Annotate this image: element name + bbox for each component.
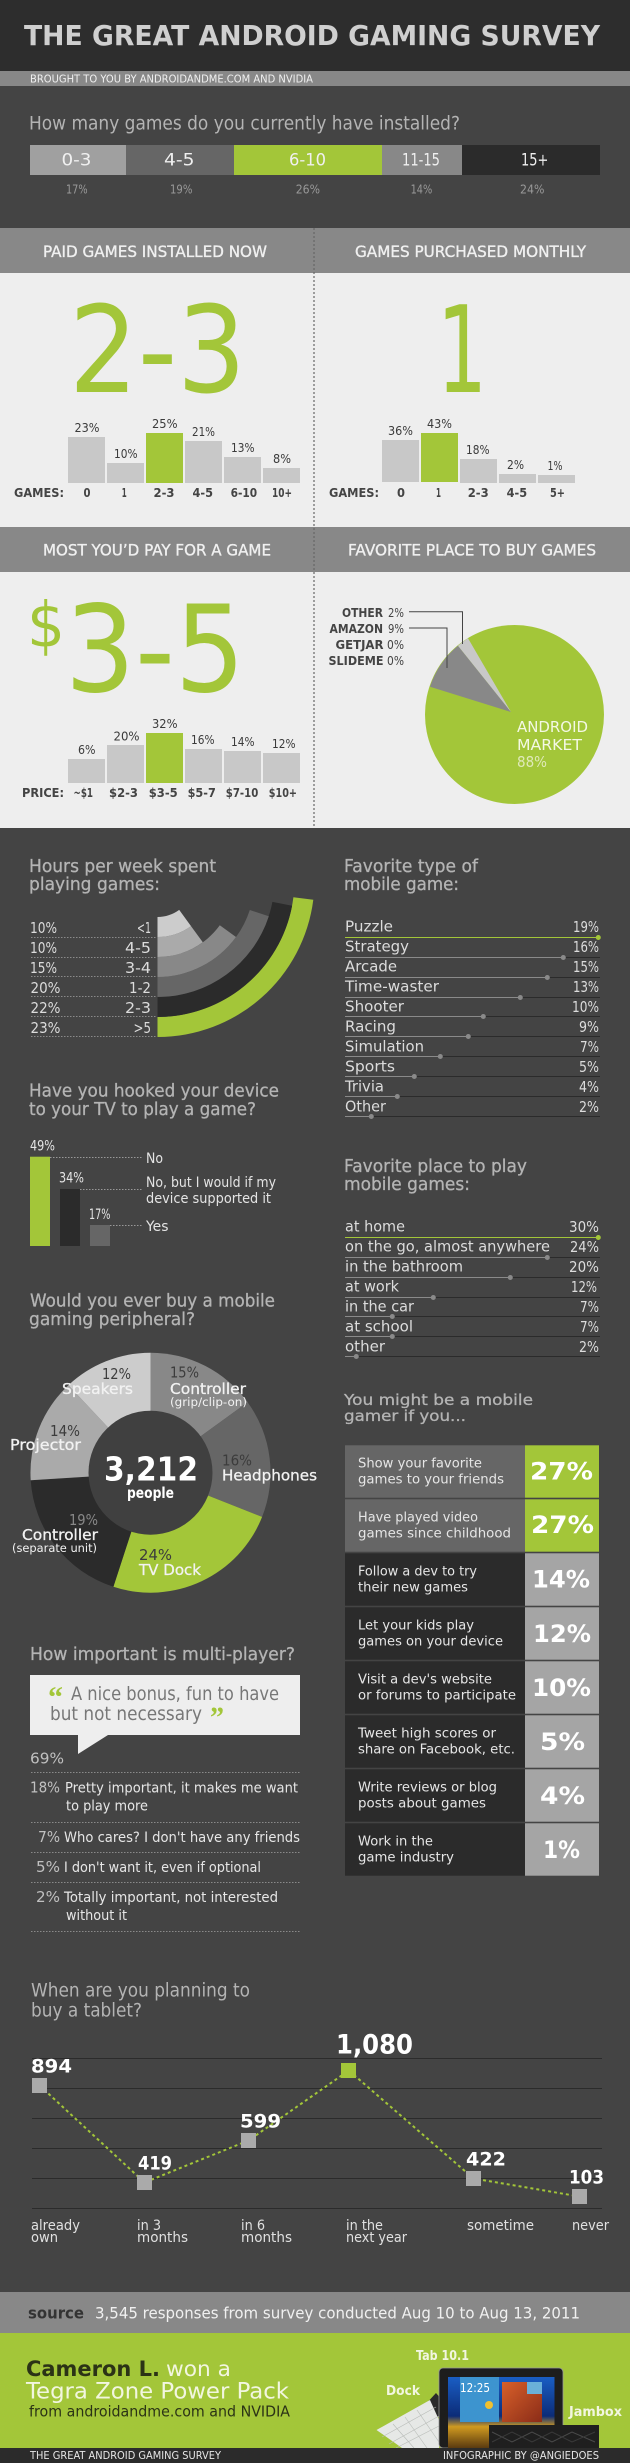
row labels: Time-waster	[344, 978, 440, 996]
axis labels: in 6	[241, 2218, 265, 2234]
heading: mobile games:	[344, 1174, 470, 1195]
chart values	[31, 2029, 604, 2188]
winner text: won a	[166, 2357, 231, 2381]
heading: Favorite place to play	[344, 1156, 527, 1177]
bar chart	[22, 717, 300, 800]
callout: but not necessary	[50, 1703, 202, 1725]
answer list: 7%	[38, 1828, 60, 1846]
winner text: Tegra Zone Power Pack	[25, 2379, 289, 2404]
big price: $	[27, 589, 65, 662]
row labels: 2%	[579, 1338, 599, 1356]
row labels: 24%	[570, 1238, 599, 1256]
row: show friends: 27%	[530, 1457, 593, 1485]
row: reviews	[345, 1769, 599, 1822]
heading: Have you hooked your device	[29, 1081, 279, 1102]
row labels: at work	[345, 1278, 399, 1296]
donut centre total	[104, 1450, 198, 1502]
axis labels: never	[572, 2218, 609, 2234]
row labels: Other	[345, 1098, 387, 1116]
bar values and labels: Yes	[145, 1219, 168, 1235]
bar chart: 2-3	[468, 486, 489, 500]
heading: When are you planning to	[31, 1981, 250, 2002]
section header band: row two	[0, 527, 630, 572]
panel: peripheral	[10, 1291, 317, 1593]
pie chart	[425, 625, 604, 804]
donut labels: TV Dock	[138, 1561, 201, 1579]
icon: tablet: 12:25	[460, 2381, 490, 2395]
pie labels: GETJAR	[336, 638, 384, 652]
bar chart: 13%	[231, 441, 254, 455]
table of hours: 10%	[30, 939, 57, 957]
prize labels: Tab 10.1	[416, 2348, 469, 2364]
big number: 2-3	[69, 282, 246, 421]
donut labels: 16%	[222, 1452, 252, 1470]
table of hours: >5	[134, 1019, 151, 1037]
bar chart: 4-5	[192, 486, 213, 500]
stacked bar: 0-3	[62, 151, 92, 171]
heading: mobile game:	[344, 874, 459, 895]
bar chart: 12%	[272, 737, 296, 751]
heading	[343, 1391, 533, 1425]
bar percentages: 14%	[411, 181, 432, 196]
row labels: 10%	[572, 998, 599, 1016]
pie labels: OTHER	[342, 606, 383, 620]
row labels: 15%	[573, 958, 599, 976]
donut labels: Projector	[10, 1436, 82, 1454]
row: since childhood: games since childhood	[358, 1525, 511, 1541]
donut labels: Controller	[170, 1380, 247, 1398]
row: show friends: Show your favorite	[358, 1455, 482, 1471]
bar chart: 8%	[273, 452, 291, 466]
bar values and labels: device supported it	[146, 1191, 271, 1207]
answer list: Pretty important, it makes me want	[65, 1781, 298, 1797]
row labels: in the car	[345, 1298, 415, 1316]
bar chart: GAMES:	[14, 486, 64, 500]
row labels: 2%	[579, 1098, 599, 1116]
bar percentages: 19%	[170, 181, 192, 196]
bar chart: ~$1	[74, 786, 93, 800]
chart values: 103	[569, 2166, 604, 2188]
row labels: 30%	[569, 1218, 599, 1236]
prize labels: Dock	[386, 2383, 421, 2399]
heading	[344, 1156, 527, 1195]
callout: ”	[210, 1701, 224, 1734]
heading	[29, 1291, 275, 1330]
row: website	[345, 1661, 599, 1714]
chart values: 894	[31, 2056, 72, 2078]
callout: A nice bonus, fun to have	[71, 1683, 279, 1705]
winner text: Cameron L.	[26, 2357, 160, 2381]
panel: hours per week	[29, 856, 313, 1037]
axis labels: in 3	[137, 2218, 161, 2234]
row: tweet: Tweet high scores or	[357, 1725, 496, 1741]
panel: tablet plans	[31, 1981, 609, 2246]
bar chart: 1%	[548, 459, 562, 473]
chart markers	[32, 2063, 587, 2204]
donut labels: 14%	[50, 1422, 80, 1440]
bar percentages	[66, 181, 544, 196]
stacked bar: 6-10	[289, 151, 326, 171]
heading	[344, 856, 479, 895]
stacked bar: 11-15	[402, 151, 440, 171]
donut labels: (separate unit)	[12, 1541, 97, 1555]
pie labels: 9%	[388, 622, 404, 636]
lollipop bars	[345, 1235, 601, 1359]
row: show friends	[345, 1445, 599, 1498]
bar chart: 25%	[152, 417, 178, 431]
heading: How many games do you currently have installed?	[29, 113, 460, 134]
android market label: 88%	[517, 753, 547, 771]
lollipop bars	[345, 935, 601, 1119]
row: tweet: share on Facebook, etc.	[358, 1741, 515, 1757]
bar chart: 5+	[550, 486, 565, 500]
row labels: 7%	[580, 1318, 599, 1336]
leader lines	[409, 612, 462, 668]
row: kids	[345, 1607, 599, 1660]
row: industry: 1%	[543, 1836, 580, 1864]
big price: 3-5	[65, 582, 245, 721]
row rules	[345, 1258, 600, 1356]
bar chart: $10+	[269, 786, 297, 800]
dotted line chart	[40, 2070, 580, 2196]
bar values and labels: No, but I would if my	[146, 1175, 276, 1191]
prize labels: Jambox	[568, 2404, 622, 2420]
bar chart: 43%	[427, 417, 452, 431]
dotted leaders	[50, 1158, 142, 1226]
source band: 3,545 responses from survey conducted Aug 10 to Aug 13, 2011	[95, 2304, 580, 2323]
row: reviews: Write reviews or blog	[358, 1779, 497, 1795]
row labels: Puzzle	[345, 918, 393, 936]
chart values: 422	[466, 2149, 506, 2171]
stacked bar: 15+	[521, 151, 548, 171]
panel: favorite place to play	[344, 1156, 601, 1359]
row: follow a dev: 14%	[532, 1566, 590, 1594]
answer list: 18%	[30, 1779, 60, 1797]
icon: keyboard dock	[376, 2393, 442, 2448]
bar chart: $3-5	[149, 786, 178, 800]
bar chart: 10%	[114, 447, 138, 461]
row labels: Arcade	[345, 958, 397, 976]
bar chart: 36%	[388, 424, 413, 438]
pie labels: SLIDEME	[328, 654, 384, 668]
bar chart: 14%	[231, 735, 254, 749]
heading: How important is multi-player?	[30, 1644, 295, 1665]
panel: games purchased monthly	[329, 282, 575, 500]
bar percentages: 26%	[296, 181, 320, 196]
bar chart: 20%	[114, 729, 140, 743]
bar chart: 32%	[152, 717, 178, 731]
row labels: other	[345, 1338, 386, 1356]
table of hours: 2-3	[125, 999, 151, 1017]
panel: favorite place to buy	[328, 606, 604, 804]
answer list: Who cares? I don't have any friends	[64, 1830, 300, 1846]
grid lines	[32, 2058, 602, 2208]
footer	[0, 2448, 630, 2463]
answer list: without it	[66, 1908, 127, 1924]
bar chart: PRICE:	[22, 786, 64, 800]
section header band: row one: PAID GAMES INSTALLED NOW	[43, 242, 267, 261]
light panels background	[0, 273, 630, 828]
bar chart: $7-10	[226, 786, 258, 800]
row: kids: 12%	[533, 1620, 591, 1648]
row labels: 7%	[580, 1298, 599, 1316]
heading: buy a tablet?	[31, 2001, 142, 2022]
row labels: in the bathroom	[345, 1258, 463, 1276]
row labels: Racing	[345, 1018, 396, 1036]
bar chart	[14, 417, 300, 500]
panel: multi-player	[30, 1644, 300, 1932]
panel: most you'd pay	[22, 582, 300, 800]
bar values and labels: No	[146, 1151, 163, 1167]
row: since childhood	[345, 1499, 599, 1552]
source band	[0, 2292, 630, 2333]
row labels: Trivia	[344, 1078, 384, 1096]
row labels	[344, 918, 599, 1116]
row labels: 4%	[579, 1078, 599, 1096]
row: industry: game industry	[358, 1849, 454, 1865]
answer list: to play more	[66, 1799, 148, 1815]
table of hours: 20%	[30, 979, 60, 997]
heading: You might be a mobile	[343, 1391, 533, 1409]
donut labels: Speakers	[62, 1380, 133, 1398]
bars	[30, 1157, 110, 1246]
big number: 1	[437, 282, 487, 421]
donut labels: (grip/clip-on)	[170, 1395, 247, 1409]
row: kids: games on your device	[358, 1633, 503, 1649]
callout: “	[48, 1681, 63, 1714]
bar chart: GAMES:	[329, 486, 379, 500]
row labels: 13%	[573, 978, 599, 996]
footer: THE GREAT ANDROID GAMING SURVEY	[29, 2450, 222, 2462]
bar chart: 4-5	[507, 486, 527, 500]
bar chart: 1	[436, 486, 441, 500]
row: industry: Work in the	[358, 1833, 433, 1849]
axis labels: months	[137, 2230, 188, 2246]
bar chart: $2-3	[109, 786, 138, 800]
table of hours: 23%	[30, 1019, 60, 1037]
row labels: Sports	[345, 1058, 395, 1076]
row: follow a dev: Follow a dev to try	[358, 1563, 477, 1579]
axis labels: sometime	[467, 2218, 534, 2234]
row labels: 16%	[573, 938, 599, 956]
bar values and labels: 34%	[59, 1171, 84, 1187]
bar values and labels: 49%	[30, 1139, 55, 1155]
answer list: 5%	[36, 1858, 60, 1876]
chart values: 599	[240, 2110, 281, 2132]
pie labels: 2%	[388, 606, 404, 620]
row labels: at school	[345, 1318, 413, 1336]
section header band: row one: GAMES PURCHASED MONTHLY	[355, 242, 586, 261]
table of hours: 22%	[30, 999, 60, 1017]
row: since childhood: Have played video	[358, 1509, 478, 1525]
row: show friends: games to your friends	[358, 1471, 504, 1487]
row labels: 12%	[571, 1278, 597, 1296]
heading: playing games:	[29, 874, 160, 895]
heading: to your TV to play a game?	[29, 1099, 256, 1120]
heading: gamer if you...	[344, 1407, 466, 1425]
table of hours: 4-5	[125, 939, 151, 957]
row: tweet	[345, 1715, 599, 1768]
winner text: from androidandme.com and NVIDIA	[29, 2403, 291, 2421]
donut labels: 12%	[102, 1365, 131, 1383]
header block	[0, 0, 630, 86]
donut labels: Headphones	[222, 1467, 317, 1485]
row: follow a dev	[345, 1553, 599, 1606]
android market label: MARKET	[517, 736, 583, 754]
answer list: 2%	[36, 1888, 60, 1906]
panel: hooked to tv	[29, 1081, 279, 1246]
row labels: 19%	[573, 918, 599, 936]
table of hours: <1	[137, 919, 151, 937]
dotted rules	[31, 1772, 300, 1932]
panel: you might be a mobile gamer	[343, 1391, 599, 1876]
row: kids: Let your kids play	[358, 1617, 474, 1633]
source band: source	[28, 2304, 84, 2323]
bar chart: 6%	[78, 743, 96, 757]
panel: paid games installed	[14, 282, 300, 500]
bar chart: 2%	[507, 458, 524, 472]
pie labels: 0%	[387, 638, 404, 652]
donut labels	[10, 1363, 317, 1579]
stacked bar: 4-5	[164, 151, 194, 171]
pie labels	[328, 606, 404, 668]
section header band: row two: FAVORITE PLACE TO BUY GAMES	[348, 541, 596, 560]
answer list: Totally important, not interested	[63, 1890, 278, 1906]
axis labels: next year	[346, 2230, 407, 2246]
bar chart: 2-3	[154, 486, 174, 500]
section header band: row two: MOST YOU’D PAY FOR A GAME	[43, 541, 271, 560]
android market label	[517, 718, 588, 771]
donut chart	[30, 1353, 271, 1593]
axis labels: already	[31, 2218, 80, 2234]
row labels: 5%	[579, 1058, 599, 1076]
row: website: Visit a dev's website	[358, 1671, 492, 1687]
bar values and labels: 17%	[89, 1207, 110, 1223]
subtitle: BROUGHT TO YOU BY ANDROIDANDME.COM AND NVIDIA	[30, 73, 314, 85]
bar chart: 0	[84, 486, 90, 500]
pie labels: AMAZON	[330, 622, 383, 636]
donut labels: 24%	[139, 1546, 172, 1564]
axis labels	[31, 2218, 609, 2246]
bar chart: 6-10	[231, 486, 257, 500]
row: industry	[345, 1823, 599, 1876]
row: follow a dev: their new games	[358, 1579, 468, 1595]
table of hours: 15%	[30, 959, 57, 977]
footer: INFOGRAPHIC BY @ANGIEDOES	[443, 2450, 599, 2462]
row: reviews: posts about games	[358, 1795, 486, 1811]
row: website: 10%	[532, 1674, 591, 1702]
answer list: I don't want it, even if optional	[64, 1860, 261, 1876]
icon: tablet	[439, 2368, 563, 2448]
bar chart: 0	[397, 486, 405, 500]
row labels: Strategy	[345, 938, 409, 956]
winner panel	[0, 2333, 630, 2448]
bar chart: 21%	[192, 425, 215, 439]
bar chart: 10+	[272, 486, 292, 500]
bar chart: 16%	[191, 733, 214, 747]
row labels	[345, 1218, 599, 1356]
axis labels: in the	[346, 2218, 383, 2234]
donut centre total: people	[127, 1484, 174, 1502]
donut centre total: 3,212	[104, 1450, 198, 1489]
chart values: 1,080	[336, 2029, 413, 2060]
title: THE GREAT ANDROID GAMING SURVEY	[24, 19, 601, 52]
bar percentages: 17%	[66, 181, 88, 196]
pie labels: 0%	[387, 654, 404, 668]
row: reviews: 4%	[540, 1782, 585, 1810]
panel: games installed	[29, 113, 600, 196]
row labels: Shooter	[345, 998, 405, 1016]
table of hours: 3-4	[125, 959, 151, 977]
heading: gaming peripheral?	[29, 1309, 195, 1330]
bar chart: 1	[122, 486, 127, 500]
row labels: on the go, almost anywhere	[345, 1238, 550, 1256]
row labels: 7%	[580, 1038, 599, 1056]
bar chart: 23%	[74, 421, 100, 435]
bar chart	[329, 417, 575, 500]
bar percentages: 24%	[520, 181, 544, 196]
axis labels: own	[31, 2230, 58, 2246]
donut labels: 19%	[69, 1511, 98, 1529]
stacked bar	[30, 145, 600, 175]
row labels: at home	[345, 1218, 405, 1236]
radial arc chart	[158, 897, 313, 1037]
row labels: 20%	[569, 1258, 599, 1276]
heading	[29, 856, 216, 895]
bar chart: 18%	[466, 443, 490, 457]
row: tweet: 5%	[540, 1728, 585, 1756]
answer list: 69%	[30, 1749, 64, 1767]
heading: Would you ever buy a mobile	[30, 1291, 275, 1312]
table of hours: 10%	[30, 919, 57, 937]
bar values and labels	[30, 1139, 276, 1235]
winner text	[25, 2357, 291, 2421]
heading	[31, 1981, 250, 2022]
answer list	[30, 1749, 300, 1924]
donut labels: Controller	[22, 1526, 99, 1544]
table of hours	[30, 919, 151, 1037]
section header band: row one	[0, 228, 630, 273]
table of hours: 1-2	[129, 979, 151, 997]
chart values: 419	[138, 2152, 172, 2174]
row labels: 9%	[579, 1018, 599, 1036]
row labels: Simulation	[345, 1038, 424, 1056]
heading: Hours per week spent	[29, 856, 216, 877]
android market label: ANDROID	[517, 718, 588, 736]
heading: Favorite type of	[344, 856, 479, 877]
row: website: or forums to participate	[358, 1687, 516, 1703]
axis labels: months	[241, 2230, 292, 2246]
dotted rules	[31, 938, 157, 1036]
icon: jambox speaker	[489, 2425, 599, 2448]
row rules	[345, 958, 600, 1116]
row: since childhood: 27%	[531, 1511, 594, 1539]
callout	[30, 1675, 300, 1754]
bar chart: $5-7	[188, 786, 216, 800]
panel: favorite type of game	[344, 856, 601, 1119]
prize labels	[386, 2348, 622, 2420]
donut labels: 15%	[170, 1363, 199, 1381]
heading	[29, 1081, 279, 1120]
